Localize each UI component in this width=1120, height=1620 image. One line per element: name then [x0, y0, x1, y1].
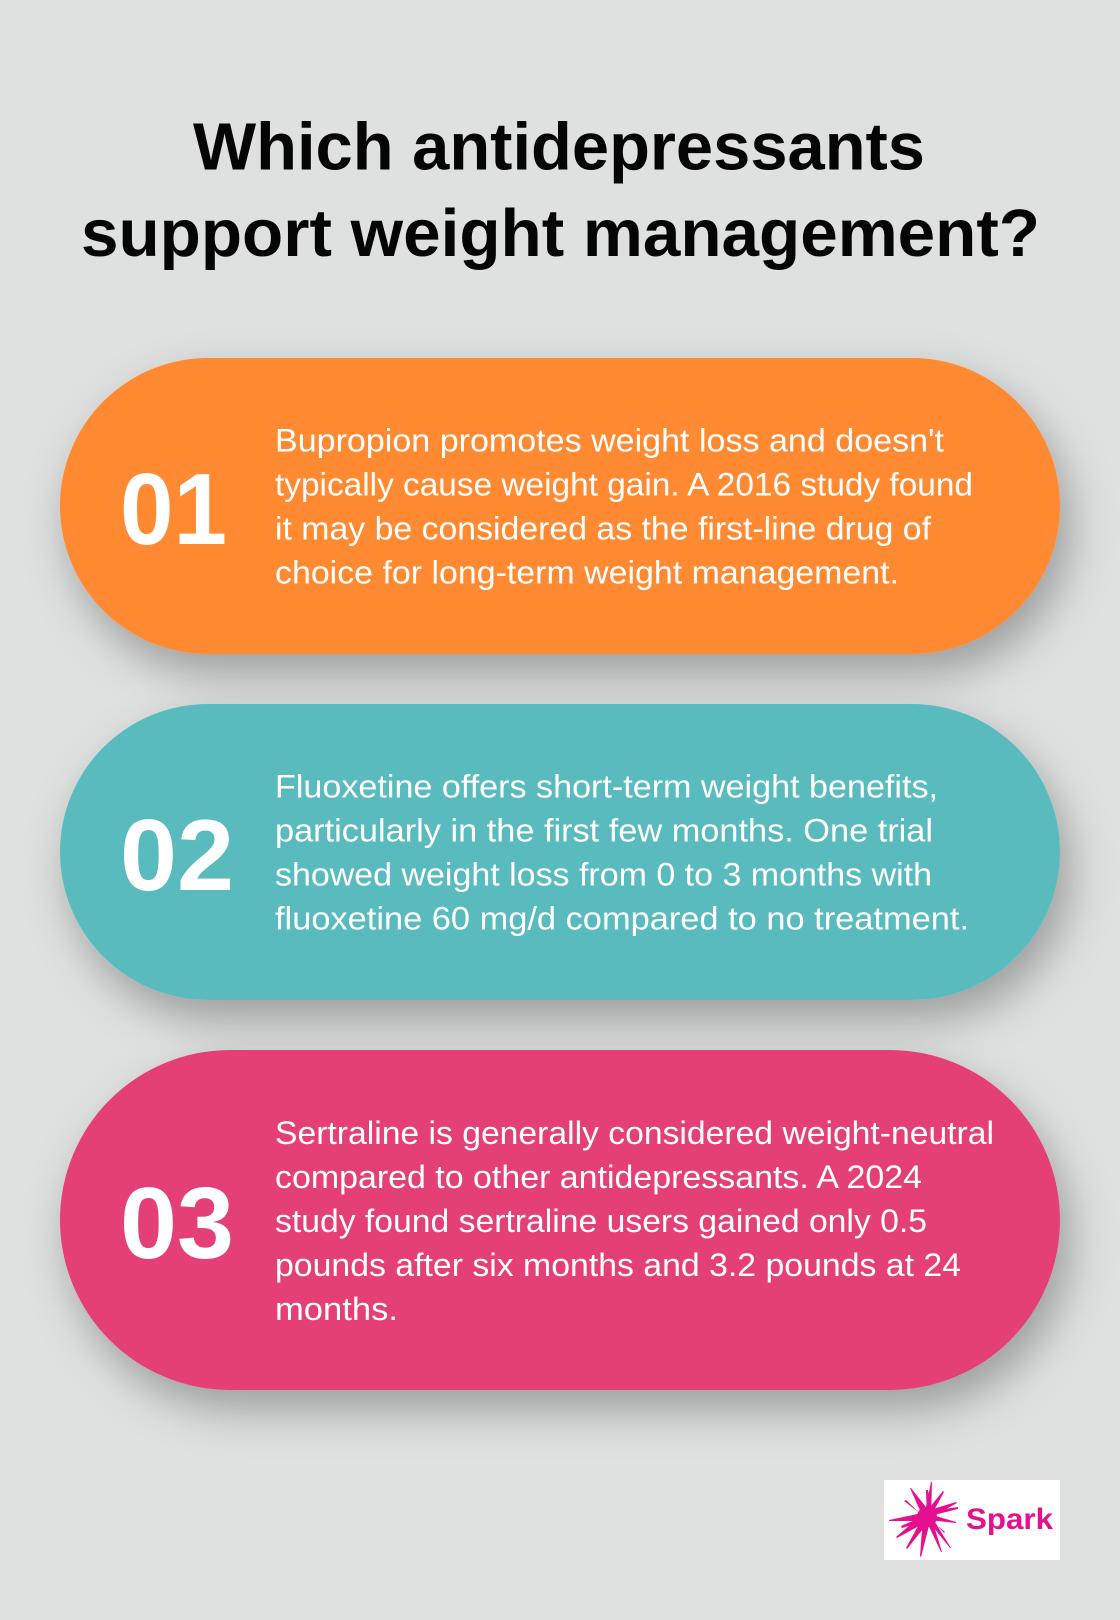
orange pill	[60, 358, 1060, 654]
number 01: 01	[120, 454, 227, 566]
text: fluoxetine: particularly in the first few months. One trial	[275, 813, 933, 849]
text: bupropion	[275, 423, 973, 591]
text: fluoxetine: showed weight loss from 0 to 3 months with	[275, 857, 932, 893]
text: bupropion: typically cause weight gain. A 2016 study found	[275, 467, 973, 503]
title	[81, 110, 1040, 271]
text: sertraline: compared to other antidepressants. A 2024	[275, 1159, 922, 1195]
text: fluoxetine: Fluoxetine offers short-term weight benefits,	[275, 769, 938, 805]
text: sertraline: Sertraline is generally considered weight-neutral	[275, 1115, 994, 1151]
title: Which antidepressants	[193, 110, 925, 184]
text: sertraline: study found sertraline users gained only 0.5	[275, 1203, 927, 1239]
text: bupropion: it may be considered as the first-line drug of	[275, 511, 932, 547]
pink pill	[60, 1050, 1060, 1390]
number 03: 03	[120, 1168, 234, 1280]
title: support weight management?	[81, 196, 1040, 271]
logo: Spark	[884, 1480, 1060, 1560]
panel: 02 fluoxetine	[60, 704, 1060, 1000]
text: sertraline	[275, 1115, 994, 1327]
panel: 01 bupropion	[60, 358, 1060, 654]
text: sertraline: pounds after six months and 3.2 pounds at 24	[275, 1247, 961, 1283]
text: fluoxetine: fluoxetine 60 mg/d compared to no treatment.	[275, 901, 969, 937]
panel: 03 sertraline	[60, 1050, 1060, 1390]
text: bupropion: choice for long-term weight management.	[275, 555, 899, 591]
text: bupropion: Bupropion promotes weight loss and doesn't	[275, 423, 944, 459]
icon: starburst	[889, 1482, 958, 1557]
wordmark: Spark	[966, 1503, 1053, 1536]
teal pill	[60, 704, 1060, 1000]
number 02: 02	[120, 800, 234, 912]
text: sertraline: months.	[275, 1291, 398, 1327]
text: fluoxetine	[275, 769, 969, 937]
